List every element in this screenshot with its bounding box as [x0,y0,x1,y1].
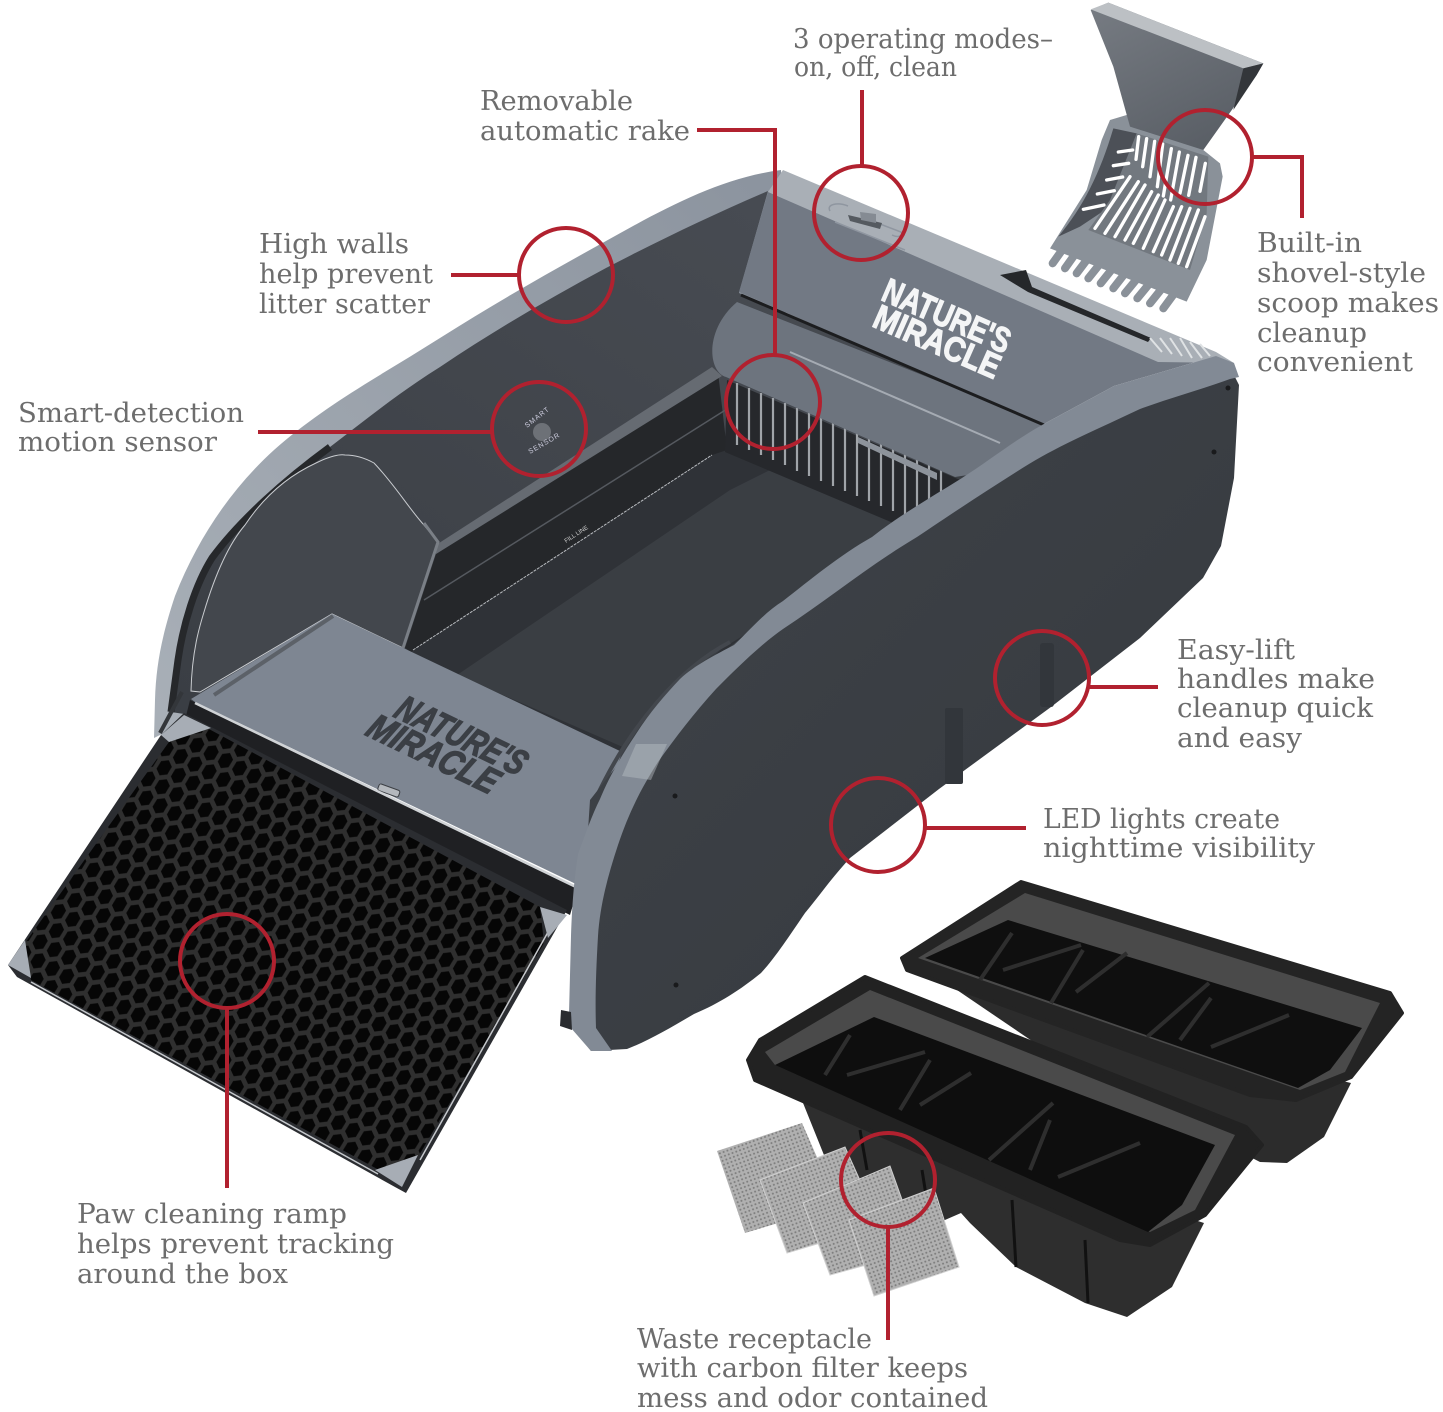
scoop handle [1091,3,1263,150]
back panel top strip [768,170,1234,363]
text: high walls: help prevent [259,259,433,290]
plate rod [214,616,333,695]
text: high walls [259,229,433,320]
tray floor [457,455,1010,748]
litter box unit [154,170,1239,1051]
text: LED lights: nighttime visibility [1043,833,1316,864]
front bin body [799,1093,1204,1317]
scoop [1050,3,1263,308]
rim inner shadow band [171,447,330,712]
text: ramp: Paw cleaning ramp [77,1199,347,1230]
front bin rim [748,977,1262,1245]
interior wall [171,191,1045,780]
back bin rim [902,882,1402,1100]
text: rake: automatic rake [480,116,690,147]
ramp floor plate [191,614,622,885]
marker: waste receptacle [841,1133,935,1340]
back bin floor [925,920,1362,1088]
rake backing [725,380,960,528]
hinge highlight [195,703,578,888]
side handles [945,643,1054,784]
text: scoop: scoop makes [1257,288,1439,319]
text: ramp: around the box [77,1259,288,1290]
text: handles [1177,635,1375,754]
text: waste receptacle: Waste receptacle [637,1324,872,1355]
mode switch [829,204,905,250]
tray ledge [436,367,722,554]
text: operating modes: on, off, clean [794,52,957,83]
scoop body [1050,114,1223,302]
left post [160,692,182,733]
fill line label: FILL LINE [564,525,590,545]
right rim [569,356,1239,1051]
ramp mesh [25,728,544,1170]
paw cleaning ramp [8,713,567,1193]
tray trough [405,372,727,652]
handle tip [1233,63,1263,110]
side slots [1083,150,1133,209]
text: scoop: cleanup [1257,318,1367,349]
text: LED lights: LED lights create [1043,804,1280,835]
scoop inner wall [1058,128,1137,237]
marker: rake [697,130,820,449]
text: waste receptacle: with carbon filter keeps [637,1353,968,1384]
trough line [424,409,727,600]
fill line [413,455,712,650]
roller highlight [790,352,1000,443]
text: scoop: Built-in [1257,228,1362,259]
text: waste receptacle [637,1324,988,1412]
foot [560,1010,572,1030]
text: ramp [77,1199,394,1290]
rake tines [737,383,941,518]
left outer rim [154,170,790,770]
corner vents [1150,338,1210,358]
callout markers [180,90,1302,1340]
marker: LED lights [831,778,1026,872]
front bin grooves [860,1130,1088,1303]
text: scoop: convenient [1257,347,1413,378]
ramp hinge band [185,700,578,915]
text: motion sensor: Smart-detection [18,398,244,429]
back panel [739,192,1216,425]
text: operating modes: 3 operating modes– [793,24,1053,55]
text: scoop [1257,228,1439,378]
rake bar [858,437,937,480]
rim highlight patch [622,744,667,780]
waste receptacle front [748,977,1262,1317]
front bin lip [765,990,1235,1232]
ramp edge lines [31,925,552,1174]
back bin ribs [980,933,1289,1047]
black slot [1000,270,1151,342]
rim inner line [596,642,730,798]
latch [377,783,400,798]
roller black slit [741,295,1044,425]
motion sensor: SENSOR [528,432,562,456]
scoop teeth [1053,248,1174,308]
text: handles: handles make [1177,664,1375,695]
motion sensor [524,406,562,456]
marker: handles [995,631,1158,725]
text: scoop: shovel-style [1257,258,1426,289]
back bin body [957,990,1351,1163]
carbon filters [717,1123,959,1296]
upper slots [1083,137,1205,267]
top logo [870,269,1014,389]
text: ramp: helps prevent tracking [77,1229,394,1260]
marker: ramp [180,914,274,1188]
front bin ribs [825,1035,1140,1177]
text: handles: cleanup quick [1177,693,1374,724]
front bin floor [775,1017,1215,1232]
top logo: NATURE'S [879,270,1014,362]
top logo: MIRACLE [870,296,1004,388]
text: motion sensor: motion sensor [18,427,217,458]
ramp corners [8,715,567,1187]
text: handles: Easy-lift [1177,635,1295,666]
scoop inner floor [1088,133,1208,270]
rake roller [712,302,1044,477]
marker: operating modes [814,90,908,260]
back bin lip [918,893,1380,1090]
lower logo: MIRACLE [359,707,509,802]
lower slots [1095,177,1205,267]
curved end panel [191,455,438,692]
text: rake: Removable [480,86,633,117]
text: LED lights [1043,804,1316,864]
tray base [411,440,1000,755]
marker: motion sensor [258,382,586,476]
text: handles: and easy [1177,723,1303,754]
screws [672,386,1230,988]
handle top strip [1091,3,1263,68]
marker: high walls [451,228,613,322]
text: high walls: litter scatter [259,289,430,320]
text: high walls: High walls [259,229,409,260]
lower logo: NATURE'S [387,688,536,783]
waste receptacle back [902,882,1402,1163]
text: motion sensor [18,398,244,458]
panel edge [403,523,438,648]
motion sensor: SMART [524,406,551,430]
dark side wall [575,362,1239,1051]
text: operating modes [793,24,1053,83]
text: rake [480,86,690,147]
ramp frame [8,713,567,1193]
marker: scoop [1158,110,1302,218]
